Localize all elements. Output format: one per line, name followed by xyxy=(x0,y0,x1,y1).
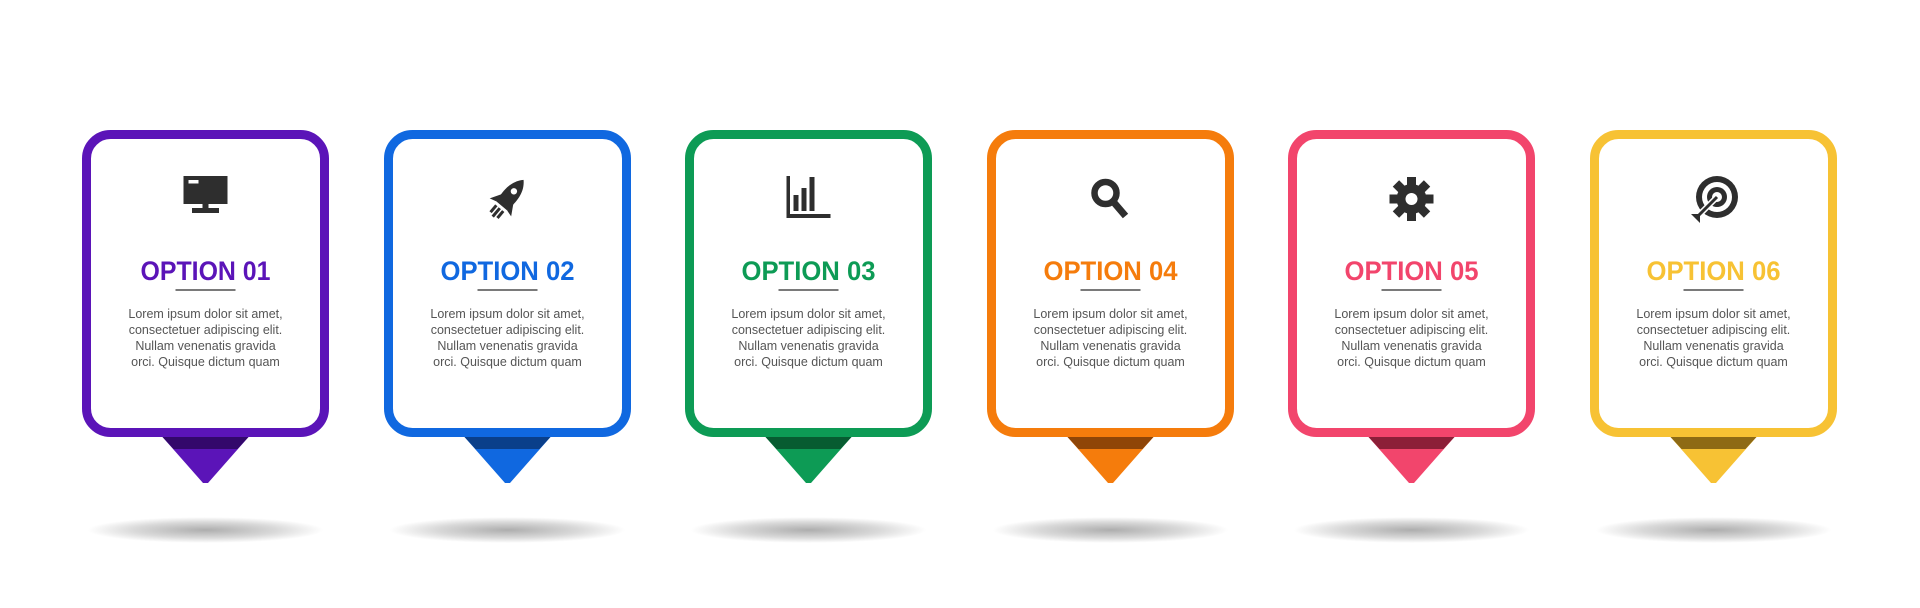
text block: orci. Quisque dictum quam xyxy=(131,355,280,369)
heading: OPTION 04 xyxy=(1044,256,1178,286)
pointer xyxy=(162,437,248,483)
pointer xyxy=(464,437,550,483)
text block: consectetuer adipiscing elit. xyxy=(1335,323,1488,337)
text block: orci. Quisque dictum quam xyxy=(1337,355,1486,369)
text block: Nullam venenatis gravida xyxy=(1643,339,1784,353)
text block xyxy=(1334,307,1489,369)
text block: orci. Quisque dictum quam xyxy=(1639,355,1788,369)
text block xyxy=(731,307,886,369)
heading: OPTION 06 xyxy=(1646,256,1780,286)
text block: Nullam venenatis gravida xyxy=(1341,339,1482,353)
icon: rocket xyxy=(482,171,534,226)
shadow xyxy=(1294,517,1530,543)
card frame xyxy=(388,134,626,432)
text block: Nullam venenatis gravida xyxy=(1040,339,1181,353)
panel: option 02 xyxy=(388,134,626,543)
panel: option 04 xyxy=(992,134,1230,543)
text block: consectetuer adipiscing elit. xyxy=(431,323,584,337)
card frame xyxy=(1292,134,1530,432)
card frame xyxy=(992,134,1230,432)
shadow xyxy=(390,517,626,543)
text block: Lorem ipsum dolor sit amet, xyxy=(1636,307,1791,321)
shadow xyxy=(88,517,324,543)
icon: target xyxy=(1691,176,1738,223)
text block: orci. Quisque dictum quam xyxy=(433,355,582,369)
text block: Lorem ipsum dolor sit amet, xyxy=(128,307,283,321)
text block: consectetuer adipiscing elit. xyxy=(1637,323,1790,337)
text block: Lorem ipsum dolor sit amet, xyxy=(1033,307,1188,321)
text block: consectetuer adipiscing elit. xyxy=(1034,323,1187,337)
text block xyxy=(430,307,585,369)
panel: option 03 xyxy=(690,134,928,543)
panel: option 06 xyxy=(1594,134,1832,543)
card frame xyxy=(86,134,324,432)
text block: consectetuer adipiscing elit. xyxy=(129,323,282,337)
text block xyxy=(128,307,283,369)
text block xyxy=(1636,307,1791,369)
shadow xyxy=(690,517,926,543)
card frame xyxy=(690,134,928,432)
icon: bar chart xyxy=(786,176,830,218)
icon: gear xyxy=(1390,177,1434,221)
shadow xyxy=(1596,517,1832,543)
text block: Lorem ipsum dolor sit amet, xyxy=(731,307,886,321)
pointer xyxy=(1670,437,1756,483)
pointer xyxy=(1368,437,1454,483)
icon: magnifier xyxy=(1094,182,1126,216)
heading: OPTION 03 xyxy=(742,256,876,286)
text block: orci. Quisque dictum quam xyxy=(734,355,883,369)
pointer xyxy=(766,437,852,483)
text block xyxy=(1033,307,1188,369)
card frame xyxy=(1594,134,1832,432)
text block: Lorem ipsum dolor sit amet, xyxy=(1334,307,1489,321)
text block: orci. Quisque dictum quam xyxy=(1036,355,1185,369)
pointer xyxy=(1068,437,1154,483)
shadow xyxy=(992,517,1228,543)
text block: Nullam venenatis gravida xyxy=(437,339,578,353)
panel: option 01 xyxy=(86,134,324,543)
text block: Lorem ipsum dolor sit amet, xyxy=(430,307,585,321)
text block: Nullam venenatis gravida xyxy=(135,339,276,353)
panel: option 05 xyxy=(1292,134,1530,543)
heading: OPTION 05 xyxy=(1344,256,1478,286)
icon: monitor xyxy=(184,176,228,213)
text block: consectetuer adipiscing elit. xyxy=(732,323,885,337)
text block: Nullam venenatis gravida xyxy=(738,339,879,353)
heading: OPTION 02 xyxy=(440,256,574,286)
heading: OPTION 01 xyxy=(140,256,270,286)
